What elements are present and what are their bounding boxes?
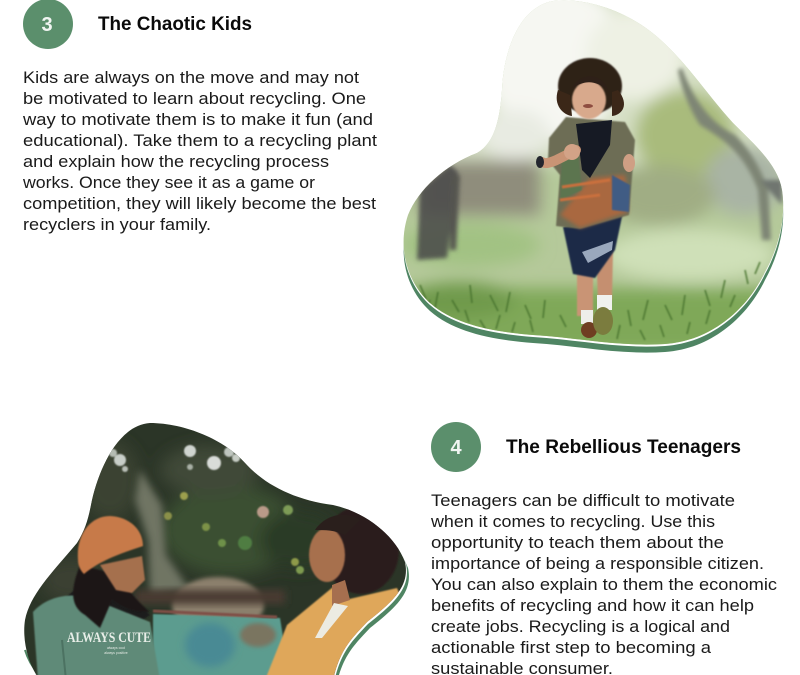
- section 3: The Chaotic Kids: [22, 0, 790, 353]
- tree trunk: [135, 470, 190, 595]
- photo blob: teenager and mother talking: [15, 415, 415, 675]
- green blob shadow: [404, 8, 783, 353]
- hair: [73, 565, 150, 628]
- arms: [542, 150, 576, 163]
- hair and face: [558, 58, 622, 114]
- jacket: [265, 587, 402, 675]
- body text: teenagers: actionable first step to becoming a: [431, 638, 712, 657]
- blurred blossoms and leaves: [109, 445, 304, 574]
- sweater print: ALWAYS CUTE: [67, 630, 151, 646]
- number badge 4: [431, 422, 481, 472]
- body text: kids: works. Once they see it as a game or: [22, 173, 315, 192]
- hair: [334, 508, 400, 594]
- left person: teen in beanie: always cool: [107, 646, 125, 650]
- tee: [576, 120, 612, 178]
- photo scene: [395, 0, 790, 353]
- body text: kids: way to motivate them is to make it fun (and: [22, 110, 373, 129]
- face: [100, 556, 145, 593]
- heading: The Chaotic Kids: The Chaotic Kids: [98, 14, 252, 35]
- white shirt: [315, 603, 348, 638]
- number badge 4: 4: [450, 437, 462, 459]
- grass: [420, 262, 760, 340]
- green edge bottom left: [25, 650, 39, 675]
- right person: woman in yellow jacket: [265, 506, 402, 675]
- section 4: The Rebellious Teenagers: [15, 415, 778, 675]
- beanie: [78, 516, 143, 574]
- heading: The Rebellious Teenagers: The Rebellious Teenagers: [506, 437, 741, 458]
- shorts: [563, 212, 623, 278]
- body text: kids: be motivated to learn about recycling. One: [23, 89, 366, 108]
- body text: teenagers: opportunity to teach them about the: [431, 533, 724, 552]
- mound: [170, 574, 266, 618]
- body text: teenagers: when it comes to recycling. Use this: [430, 512, 715, 531]
- shoes: [581, 322, 597, 338]
- left person: teen in beanie: [33, 516, 160, 675]
- body text: kids: educational). Take them to a recycling plant: [23, 131, 377, 150]
- body text: teenagers: You can also explain to them the economic: [431, 575, 778, 594]
- child: [536, 58, 635, 338]
- face: [309, 528, 345, 582]
- body text: teenagers: create jobs. Recycling is a logical and: [431, 617, 730, 636]
- raised leg: [596, 250, 613, 300]
- number badge 3: [23, 0, 73, 49]
- neck: [332, 580, 350, 606]
- teal rusted container: [153, 614, 290, 675]
- left person: teen in beanie: always positive: [104, 651, 128, 655]
- body text: kids: Kids are always on the move and may not: [23, 68, 359, 87]
- photo scene: [15, 415, 415, 675]
- body text: kids: and explain how the recycling process: [23, 152, 329, 171]
- body text: kids: competition, they will likely become the best: [23, 194, 376, 213]
- body text: teenagers: benefits of recycling and how it can help: [431, 596, 754, 615]
- green blob shadow: [27, 429, 409, 675]
- body text: kids: [22, 68, 377, 234]
- body text: teenagers: importance of being a responsible citizen.: [431, 554, 764, 573]
- back leg: [577, 270, 593, 316]
- photo blob: child running in a meadow: [395, 0, 790, 353]
- body text: teenagers: [430, 491, 778, 675]
- body text: kids: recyclers in your family.: [23, 215, 211, 234]
- plaid shirt: [548, 117, 635, 229]
- number badge 3: 3: [41, 14, 53, 36]
- body text: teenagers: Teenagers can be difficult to motivate: [431, 491, 735, 510]
